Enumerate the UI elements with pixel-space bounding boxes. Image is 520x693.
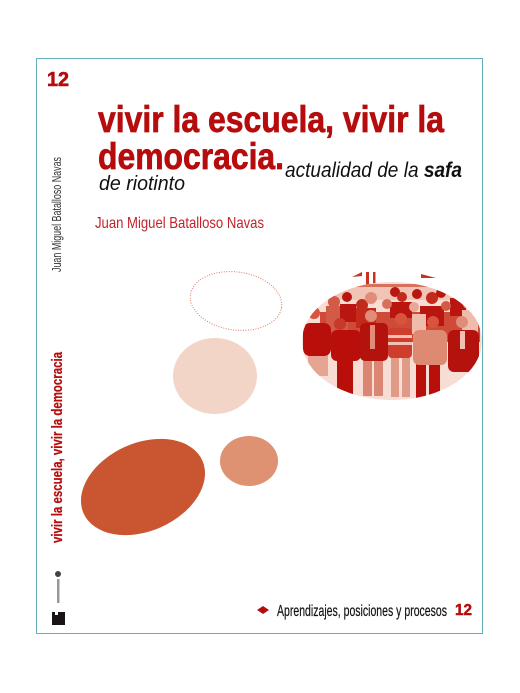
cover frame [36, 58, 482, 634]
front row [303, 307, 479, 400]
small orange ellipse [220, 436, 278, 486]
volume number top: 12 [47, 69, 69, 91]
spine title: vivir la escuela, vivir la democracia [49, 352, 66, 543]
publisher logo [55, 571, 61, 603]
subtitle: de riotinto [99, 173, 185, 195]
title: democracia. [98, 136, 284, 177]
dotted ellipse [186, 266, 286, 336]
subtitle: actualidad de la safa [285, 159, 462, 182]
book cover [36, 58, 483, 634]
back row [320, 287, 480, 342]
title [98, 99, 444, 177]
spine author: Juan Miguel Batalloso Navas [49, 157, 64, 272]
author: Juan Miguel Batalloso Navas [95, 215, 264, 232]
pale pink ellipse [173, 338, 257, 414]
publisher mark [52, 612, 65, 625]
volume number bottom: 12 [455, 602, 472, 619]
title: vivir la escuela, vivir la [98, 99, 444, 140]
photo: group of students [300, 272, 484, 402]
large orange ellipse [66, 420, 220, 554]
subtitle [99, 159, 462, 195]
diamond bullet [257, 606, 269, 614]
